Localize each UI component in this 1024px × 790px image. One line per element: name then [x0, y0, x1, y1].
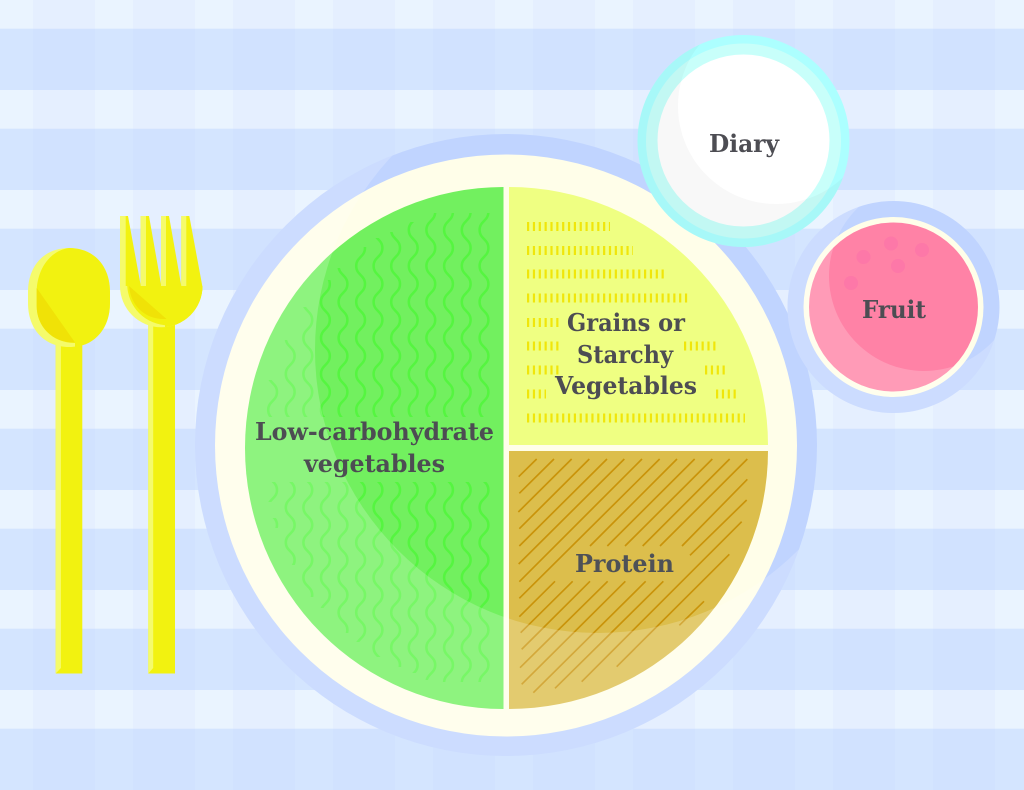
panel: dairy bowl [638, 35, 850, 247]
panel: fruit bowl [788, 201, 1000, 413]
fork handle [148, 320, 175, 674]
section: protein [509, 451, 768, 709]
fork head [120, 286, 202, 328]
section: low-carbohydrate vegetables [245, 187, 504, 709]
plate rim [195, 134, 817, 756]
section: grains or starchy vegetables [509, 187, 768, 445]
fork tines [120, 216, 202, 287]
label: low-carbohydrate vegetables: vegetables [303, 449, 445, 478]
label: protein: Protein [575, 549, 674, 578]
plate light overlay [195, 156, 798, 756]
fruit bowl inner ring [804, 217, 984, 397]
fruit fill [809, 222, 978, 392]
label: diary: Diary [709, 129, 780, 158]
spoon handle [56, 340, 82, 674]
spoon head [28, 248, 110, 347]
fruit seeds [844, 236, 929, 290]
plate surface [215, 154, 797, 736]
label: grains or starchy vegetables: Starchy [577, 340, 674, 369]
label: fruit: Fruit [862, 295, 926, 324]
label: grains or starchy vegetables: Vegetables [554, 371, 697, 400]
label: grains or starchy vegetables: Grains or [567, 308, 685, 337]
label: low-carbohydrate vegetables [255, 417, 494, 478]
dairy bowl rim [638, 35, 850, 247]
label: low-carbohydrate vegetables: Low-carbohydrate [255, 417, 494, 446]
pattern: grain ticks [527, 226, 745, 418]
pattern: protein hatching [518, 459, 747, 693]
pattern: green waves [268, 212, 488, 700]
fruit bowl light overlay [788, 207, 994, 413]
icon: fork [120, 216, 210, 674]
dairy fill [658, 54, 830, 226]
dairy bowl shade overlay [630, 8, 874, 255]
panel: plate [195, 134, 817, 756]
label: grains or starchy vegetables [554, 308, 697, 400]
fruit bowl rim [788, 201, 1000, 413]
dairy bowl inner ring [646, 44, 841, 238]
icon: spoon [28, 248, 110, 674]
